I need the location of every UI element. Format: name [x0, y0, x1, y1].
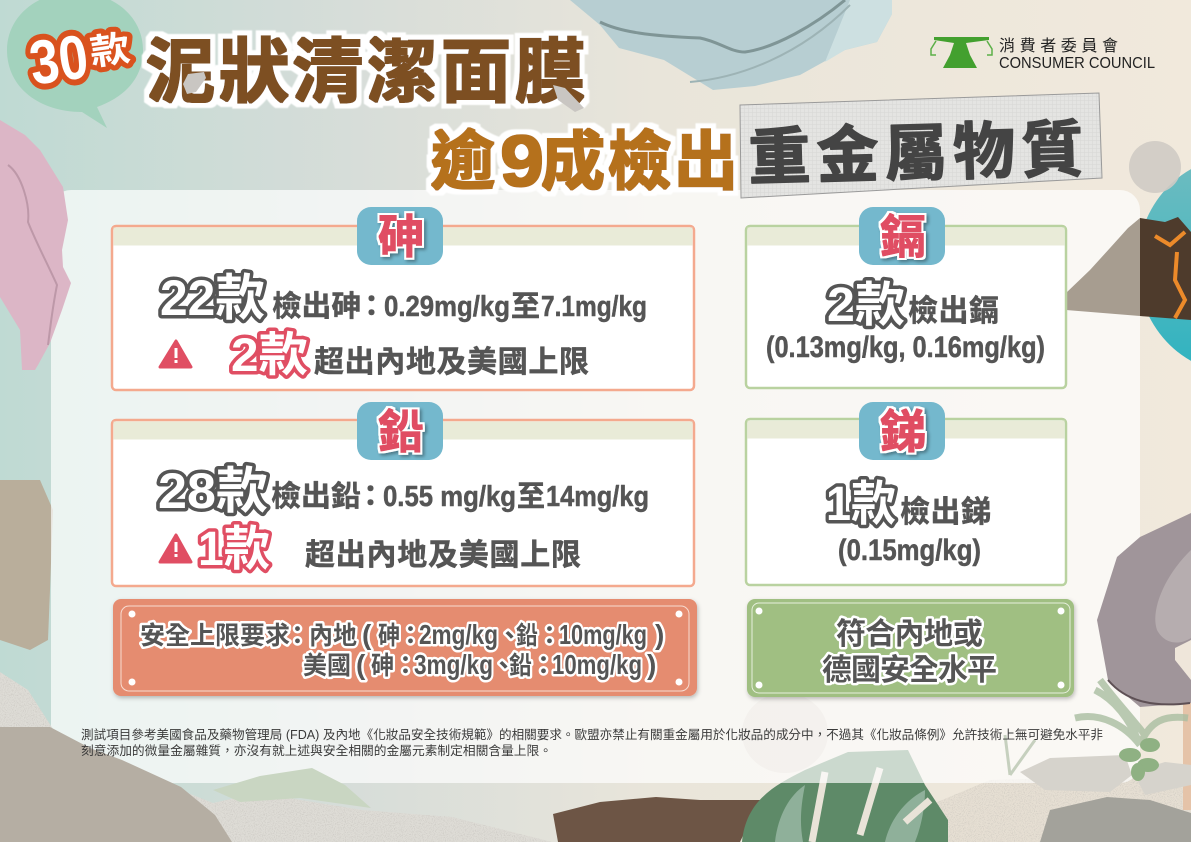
tag: 砷: 砷: [378, 211, 424, 263]
decoration: gravel strip: [0, 672, 552, 842]
panel: 鎘: [746, 207, 1066, 388]
detail: cadmium values: (0.13mg/kg, 0.16mg/kg): [766, 331, 1045, 364]
footnote: 測試項目參考美國食品及藥物管理局 (FDA) 及內地《化妝品安全技術規範》的相關要求。歐盟亦禁止有關重金屬用於化妝品的成分中，不過其《化妝品條例》允許技術上無可避免水平非: [81, 727, 1103, 742]
detail: over limit: 超出內地及美國上限: [305, 539, 581, 572]
limits line 1: 鉛: [516, 622, 538, 650]
limits line 1: ): [655, 619, 664, 650]
limits line 1: ：: [398, 622, 423, 650]
tag: 砷: [357, 207, 443, 265]
decoration: stone bed: [925, 770, 1191, 842]
decoration: grey stone: [1040, 797, 1191, 842]
decoration: mauve clay: [1097, 513, 1191, 707]
limits line 1: ：: [285, 622, 310, 650]
decoration: monstera leaf: [742, 750, 948, 842]
decoration: pale green clay: [213, 768, 371, 808]
tag: 鎘: 鎘: [880, 211, 926, 263]
limits line 2: 、: [491, 652, 516, 680]
decoration: teal circle: [1137, 157, 1191, 373]
decoration: striped stone circle: [1129, 141, 1181, 193]
decoration: faint stone behind text: [742, 693, 828, 773]
decoration: small green leaves: [1119, 738, 1160, 781]
limits line 2: 3mg/kg: [414, 649, 493, 680]
limits line 2: 美國: [303, 652, 351, 680]
limits line 1: 內地: [309, 622, 357, 650]
limits line 2: 10mg/kg: [552, 649, 642, 680]
compliant line 2: 德國安全水平: [822, 654, 997, 687]
detail: antimony: 檢出銻: [900, 496, 991, 529]
logo: [931, 37, 1155, 72]
detail: arsenic range: ：: [357, 291, 386, 323]
decoration: blue-grey clay smear: [570, 0, 892, 90]
count: 1款: 1款: [826, 478, 896, 531]
panel: 鉛: [112, 402, 694, 586]
limits line 1: 2mg/kg: [419, 619, 498, 650]
panel: 砷: [112, 207, 694, 390]
decoration: volcano: [1040, 217, 1191, 320]
speech bubble: 30款: 款: [87, 27, 133, 73]
decoration: peach strip: [1183, 700, 1191, 810]
count: 1款 over limit: 1款: [198, 523, 270, 576]
decoration: pink clay smear: [0, 120, 71, 370]
logo text: CONSUMER COUNCIL: [999, 55, 1155, 72]
detail: arsenic range: 檢出砷: [272, 290, 361, 323]
count: 2款 over limit: 2款: [231, 328, 308, 381]
title line 2: 逾: [431, 126, 495, 198]
title line 2: 成檢出: [541, 126, 738, 198]
limits line 1: 安全上限要求: [140, 622, 290, 650]
logo text: 消費者委員會: [999, 37, 1118, 55]
panel: compliant: [747, 599, 1074, 697]
limits line 2: ): [647, 649, 656, 680]
speech bubble: 30款: [7, 0, 143, 128]
icon: warning: [160, 341, 191, 367]
panel: 銻: [746, 402, 1066, 585]
limits line 2: 鉛: [509, 652, 532, 680]
decoration: tan clay: [0, 480, 53, 650]
panel: safety limits: [113, 599, 697, 696]
detail: lead range: ：: [356, 481, 385, 513]
title line 2: 9: [500, 122, 544, 202]
title line 1: 泥狀清潔面膜: [145, 33, 585, 111]
tag: 銻: [859, 402, 945, 460]
tag: 鉛: [357, 402, 443, 460]
compliant line 1: 符合內地或: [836, 618, 983, 651]
decoration: fern plants: [1005, 680, 1188, 775]
detail: lead range: 0.55 mg/kg: [383, 481, 516, 513]
detail: arsenic range: 0.29mg/kg: [384, 291, 510, 323]
title tape: 重金屬物質: [748, 116, 1084, 193]
main translucent panel: [51, 190, 1140, 783]
decoration: grey clay: [0, 727, 232, 842]
logo icon: scales: [931, 37, 992, 68]
limits line 2: (: [356, 649, 366, 680]
limits line 1: ：: [537, 622, 562, 650]
icon: warning: [160, 535, 191, 562]
detail: arsenic range: 至: [511, 291, 540, 323]
detail: cadmium: 檢出鎘: [908, 295, 999, 328]
limits line 2: 砷: [371, 652, 394, 680]
limits line 2: ：: [393, 652, 418, 680]
limits line 2: ：: [531, 652, 556, 680]
count: 28款: 28款: [158, 463, 268, 519]
footnote: [81, 727, 1103, 758]
detail: arsenic range: 7.1mg/kg: [541, 291, 647, 323]
limits line 1: 、: [497, 622, 522, 650]
decoration: brown rock: [553, 797, 760, 842]
tag: 鉛: 鉛: [378, 406, 424, 458]
title tape: [740, 93, 1102, 198]
title smudges: [183, 72, 584, 112]
detail: antimony value: (0.15mg/kg): [838, 534, 981, 567]
tag: 銻: 銻: [880, 406, 926, 458]
detail: lead range: 檢出鉛: [271, 480, 361, 513]
logo text: [999, 37, 1155, 72]
decoration: pale stones: [1020, 755, 1191, 795]
tag: 鎘: [859, 207, 945, 265]
limits line 1: (: [362, 619, 372, 650]
limits line 1: 10mg/kg: [559, 619, 647, 650]
count: 2款: 2款: [827, 279, 905, 332]
count: 22款: 22款: [160, 270, 265, 326]
detail: over limit: 超出內地及美國上限: [314, 346, 589, 379]
speech bubble: 30款: 30: [25, 22, 92, 99]
limits line 1: 砷: [378, 622, 400, 650]
detail: lead range: 14mg/kg: [546, 481, 649, 513]
footnote: 刻意添加的微量金屬雜質，亦沒有就上述與安全相關的金屬元素制定相關含量上限。: [81, 743, 552, 758]
detail: lead range: 至: [517, 481, 545, 513]
